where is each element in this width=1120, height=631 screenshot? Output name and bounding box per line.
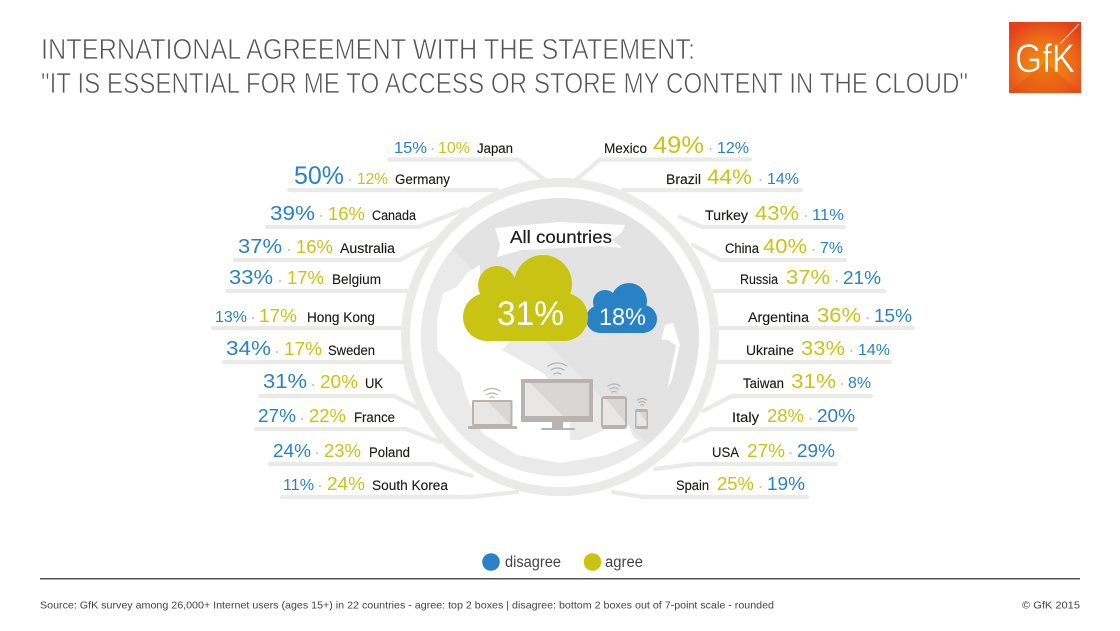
- row: Mexico: 49%: [653, 132, 704, 159]
- row: Australia: 37%: [238, 236, 282, 258]
- row: Sweden: 17%: [284, 339, 322, 359]
- cloud: disagree 18%: [586, 283, 657, 333]
- row: Spain: Spain: [676, 478, 709, 493]
- row: Canada: Canada: [372, 208, 416, 223]
- icon: laptop: [468, 388, 517, 429]
- row: Italy: [732, 406, 855, 426]
- globe: [420, 197, 700, 477]
- row: USA: 27%: [747, 441, 785, 461]
- heading: all countries: All countries: [510, 227, 612, 247]
- row: Russia: 21%: [843, 268, 881, 288]
- row: Hong Kong: Hong Kong: [307, 310, 375, 325]
- row: Germany: [294, 162, 450, 190]
- row: Ukraine: 14%: [858, 342, 890, 359]
- row: South Korea: 11%: [283, 477, 314, 494]
- connector lines: [213, 160, 913, 497]
- row: Turkey: 11%: [812, 207, 844, 224]
- row: Russia: Russia: [740, 272, 778, 287]
- legend: agree: [605, 554, 643, 571]
- row: Sweden: [226, 338, 375, 360]
- row: Canada: 16%: [328, 204, 365, 224]
- row: Brazil: [666, 165, 799, 189]
- row: Hong Kong: 13%: [215, 309, 247, 326]
- copyright: © GfK 2015: [1022, 600, 1080, 612]
- row: Hong Kong: [215, 306, 375, 326]
- row: Hong Kong: 17%: [259, 306, 297, 326]
- globe lighter half: [420, 217, 680, 477]
- row: Turkey: 43%: [755, 203, 799, 225]
- row: Italy: 20%: [817, 406, 855, 426]
- row: Russia: 37%: [786, 267, 830, 289]
- row: Spain: 25%: [717, 474, 754, 494]
- row: Brazil: Brazil: [666, 172, 701, 187]
- row: Brazil: 14%: [767, 171, 799, 188]
- row: Mexico: [604, 132, 749, 159]
- legend: [482, 553, 643, 571]
- devices: [468, 363, 648, 430]
- row: South Korea: South Korea: [372, 478, 448, 493]
- row: Ukraine: [746, 338, 890, 360]
- row: Brazil: 44%: [707, 165, 752, 189]
- row: Argentina: 36%: [817, 305, 861, 327]
- row: Germany: Germany: [395, 172, 450, 187]
- row: Poland: 23%: [324, 441, 361, 461]
- row: Taiwan: 31%: [791, 371, 836, 393]
- row: Spain: [676, 474, 805, 494]
- row: China: 7%: [820, 240, 843, 257]
- row: France: 27%: [258, 406, 296, 426]
- row: USA: [712, 441, 835, 461]
- icon: monitor: [521, 363, 593, 430]
- ocean behind heading: [495, 222, 625, 257]
- icon: tablet: [601, 384, 627, 429]
- outer ring: [406, 182, 714, 492]
- row: Australia: [238, 236, 396, 258]
- row: China: [725, 236, 843, 258]
- row: Japan: 15%: [394, 140, 427, 157]
- row: France: 22%: [309, 406, 346, 426]
- row: Sweden: Sweden: [328, 343, 375, 358]
- row: Poland: 24%: [273, 441, 311, 461]
- row: Belgium: 17%: [287, 268, 324, 288]
- cloud: agree 31%: [463, 255, 588, 341]
- source note: Source: GfK survey among 26,000+ Internet users (ages 15+) in 22 countries - agree: top 2 boxes | disagree: bottom 2 boxes out of 7-point scale - rounded: [40, 600, 774, 612]
- row: UK: UK: [365, 376, 383, 391]
- row: Germany: 50%: [294, 162, 344, 190]
- row: Australia: Australia: [340, 241, 396, 256]
- row: China: China: [725, 241, 759, 256]
- row: South Korea: 24%: [327, 474, 365, 494]
- row: Belgium: 33%: [229, 267, 273, 289]
- row: France: France: [354, 410, 395, 425]
- row: UK: 31%: [263, 371, 307, 393]
- row: Italy: 28%: [767, 406, 804, 426]
- row: Italy: Italy: [732, 410, 759, 425]
- row: Poland: Poland: [369, 445, 410, 460]
- row: Belgium: Belgium: [332, 272, 381, 287]
- row: Poland: [273, 441, 410, 461]
- row: USA: 29%: [797, 441, 835, 461]
- row: South Korea: [283, 474, 448, 494]
- row: Argentina: Argentina: [748, 310, 810, 325]
- row: Germany: 12%: [357, 171, 388, 188]
- row: Russia: [740, 267, 881, 289]
- title: [41, 34, 968, 100]
- title: "IT IS ESSENTIAL FOR ME TO ACCESS OR STORE MY CONTENT IN THE CLOUD": [41, 68, 968, 100]
- icon: phone: [635, 398, 648, 429]
- row: Belgium: [229, 267, 381, 289]
- row: Mexico: Mexico: [604, 141, 647, 156]
- row: Sweden: 34%: [226, 338, 271, 360]
- row: Turkey: [705, 203, 844, 225]
- row: Canada: [270, 203, 416, 225]
- row: Ukraine: 33%: [801, 338, 845, 360]
- row: Canada: 39%: [270, 203, 315, 225]
- land lower: [502, 341, 641, 440]
- cloud: agree 31%: 31%: [497, 295, 564, 333]
- legend: disagree: [505, 554, 561, 571]
- row: China: 40%: [763, 236, 807, 258]
- row: Japan: Japan: [477, 141, 513, 156]
- ocean lower: [437, 265, 680, 463]
- title: INTERNATIONAL AGREEMENT WITH THE STATEMENT:: [41, 34, 695, 66]
- row: France: [258, 406, 395, 426]
- row: Argentina: 15%: [874, 306, 912, 326]
- row: Spain: 19%: [767, 474, 805, 494]
- logo: GfK: [1009, 22, 1081, 93]
- row: Japan: [394, 140, 513, 157]
- logo: GfK: GfK: [1015, 37, 1075, 81]
- row: Taiwan: Taiwan: [743, 376, 784, 391]
- row: Taiwan: [743, 371, 871, 393]
- row: Turkey: Turkey: [705, 208, 748, 223]
- row: Japan: 10%: [438, 140, 470, 157]
- cloud: disagree 18%: 18%: [599, 304, 646, 331]
- row: USA: USA: [712, 445, 739, 460]
- row: Australia: 16%: [296, 237, 333, 257]
- row: UK: 20%: [320, 372, 358, 392]
- row: Ukraine: Ukraine: [746, 343, 794, 358]
- row: Argentina: [748, 305, 912, 327]
- row: Mexico: 12%: [717, 140, 749, 157]
- row: UK: [263, 371, 383, 393]
- row: Taiwan: 8%: [848, 375, 871, 392]
